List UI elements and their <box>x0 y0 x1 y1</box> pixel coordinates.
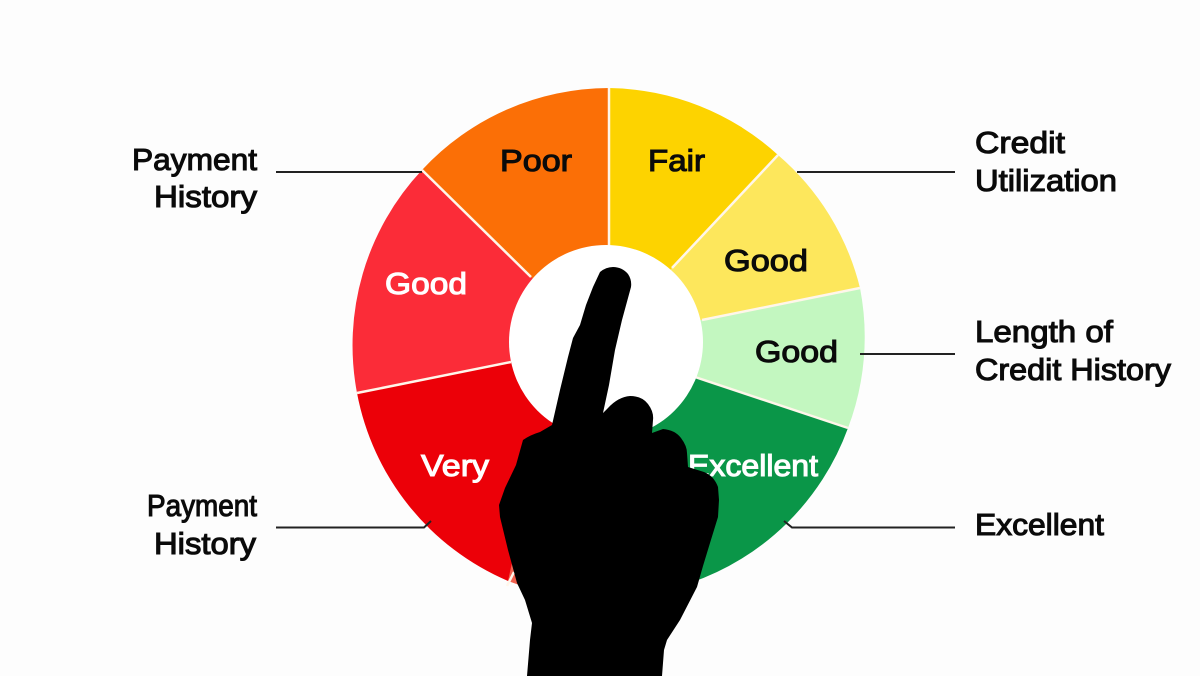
heading: length of credit history <box>975 314 1172 387</box>
connector: payment history bottom <box>276 521 431 528</box>
connector: credit utilization <box>797 171 955 173</box>
label: good yellow: Good <box>724 243 808 278</box>
label: excellent in wheel: Excellent <box>688 448 818 483</box>
connector: payment history top <box>276 171 422 173</box>
heading: length of credit history: Length of <box>975 314 1113 349</box>
centre circle <box>509 245 703 439</box>
heading: payment history bottom: History <box>154 526 257 561</box>
icon: pointing hand silhouette <box>499 267 719 676</box>
label: fair: Fair <box>648 143 705 178</box>
heading: payment history top: Payment <box>132 142 257 177</box>
heading: payment history bottom <box>147 488 257 561</box>
label: good green: Good <box>755 334 838 369</box>
segment: very <box>357 342 609 581</box>
connector: length of credit history <box>860 353 955 355</box>
heading: payment history top: History <box>154 179 258 214</box>
segment: excellent <box>609 342 848 583</box>
segment: fair <box>609 88 778 342</box>
label: very: Very <box>421 448 490 483</box>
heading: credit utilization <box>975 125 1117 198</box>
segment: light yellow good <box>609 155 860 342</box>
label: poor: Poor <box>500 143 572 178</box>
heading: payment history bottom: Payment <box>147 488 257 523</box>
score wheel <box>353 88 865 595</box>
heading: credit utilization: Credit <box>975 125 1065 160</box>
heading: excellent: Excellent <box>975 507 1104 542</box>
segment: red good <box>353 170 609 393</box>
heading: payment history top <box>132 142 258 214</box>
segment: poor <box>422 88 609 342</box>
segment: light green good <box>609 288 865 428</box>
segment: bottom sliver <box>508 480 560 595</box>
heading: credit utilization: Utilization <box>975 163 1117 198</box>
heading: length of credit history: Credit History <box>975 352 1172 387</box>
label: good red: Good <box>385 266 467 301</box>
connector: excellent <box>784 521 955 528</box>
dividers <box>357 88 860 586</box>
